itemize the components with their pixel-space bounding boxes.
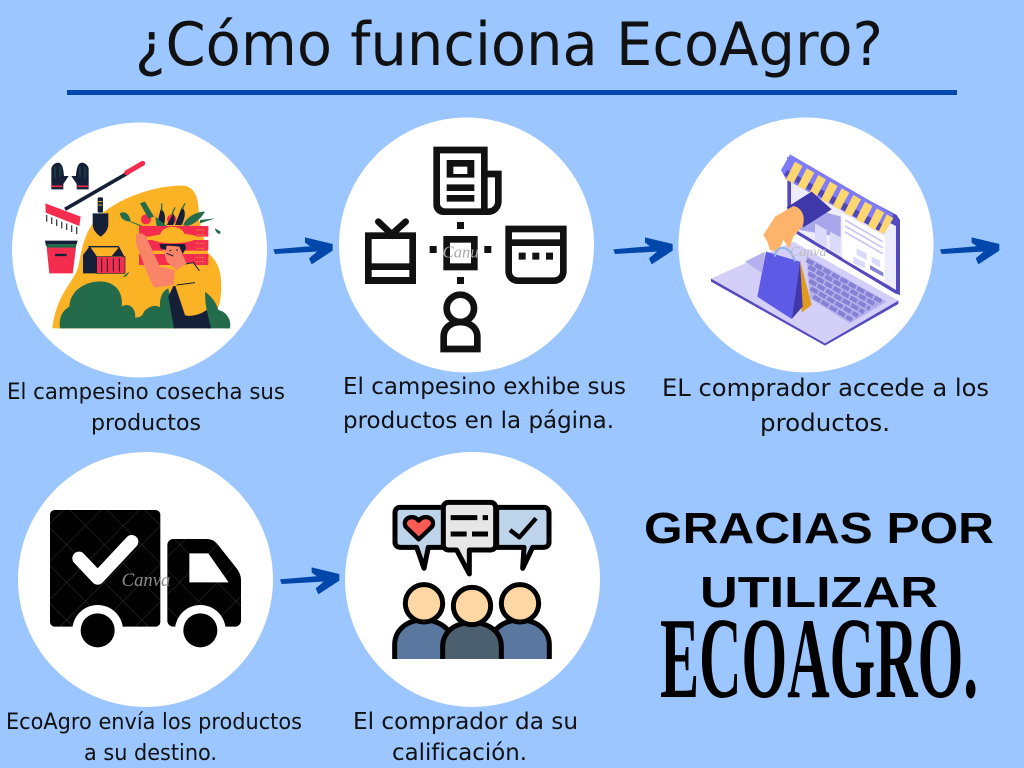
- closing message: GRACIAS POR: [644, 504, 994, 553]
- arrow: step 1 to 2: [273, 237, 333, 264]
- step 4 caption: EcoAgro envía los productos: [6, 710, 302, 735]
- watermark: Canu: [443, 242, 479, 261]
- step 1 caption: El campesino cosecha sus: [7, 380, 285, 405]
- arm and hand: [787, 192, 832, 227]
- step 3 caption: EL comprador accede a los: [662, 374, 989, 402]
- icon: farmer and tools: [45, 163, 230, 328]
- icon: delivery truck with check: [50, 510, 243, 656]
- arrow: step 2 to 3: [613, 237, 673, 264]
- keyboard: [745, 252, 887, 323]
- step 2 caption: productos en la página.: [343, 408, 614, 434]
- laptop base: [711, 278, 898, 346]
- step 2 caption: [343, 374, 626, 434]
- icon: left person: [392, 582, 449, 659]
- closing message: UTILIZAR: [700, 568, 938, 617]
- closing message: [644, 504, 994, 723]
- icon: newspaper: [433, 147, 502, 215]
- icon: delivery truck with check: Canva: [122, 570, 170, 591]
- laptop screen: [787, 157, 900, 295]
- awning: [781, 154, 893, 234]
- icon: check speech bubble: [497, 507, 549, 568]
- gloves: [51, 163, 69, 189]
- trowel: [93, 213, 108, 237]
- arrow: step 4 to 5: [280, 567, 339, 594]
- toolbox: [83, 247, 97, 273]
- step 4 caption: a su destino.: [84, 741, 217, 766]
- icon: laptop storefront: [711, 154, 900, 346]
- step 2 caption: El campesino exhibe sus: [343, 374, 626, 400]
- icon: television: [365, 222, 416, 284]
- icon: heart speech bubble: [395, 507, 447, 568]
- step 3: online shop laptop: [678, 118, 934, 372]
- icon: text speech bubble: [443, 502, 496, 574]
- step 3 caption: [662, 374, 989, 437]
- step 4: delivery truck: [18, 452, 273, 707]
- shirt: [173, 263, 207, 316]
- icon: right person: [494, 582, 552, 659]
- step 1 caption: productos: [91, 411, 201, 436]
- icon: person: [444, 295, 477, 349]
- bucket: [45, 241, 78, 246]
- step 5 caption: El comprador da su: [353, 709, 578, 735]
- icon: media channels: [365, 147, 567, 349]
- icon: browser window: [505, 226, 567, 284]
- step 5: buyers giving ratings: [345, 452, 600, 707]
- icon: laptop storefront: Canva: [790, 245, 827, 260]
- step 4 caption: [6, 710, 302, 766]
- title: ¿Cómo funciona EcoAgro?: [135, 10, 883, 80]
- arm: [136, 233, 175, 288]
- veggies: [142, 212, 201, 226]
- step 3 caption: productos.: [760, 409, 890, 437]
- step 1 caption: [7, 380, 285, 436]
- rake: [65, 173, 128, 209]
- step 5 caption: calificación.: [392, 740, 527, 766]
- step 2: exhibit on channels: [339, 118, 594, 372]
- shopping bags: [800, 260, 812, 313]
- icon: connector hub: [430, 222, 491, 284]
- arrow: step 3 onward: [940, 237, 999, 264]
- icon: people with speech bubbles: [395, 502, 549, 670]
- icon: centre person: [443, 587, 501, 670]
- head: [163, 246, 187, 270]
- step 5 caption: [353, 709, 578, 766]
- step 1: farmer harvesting: [12, 122, 267, 378]
- title underline: [67, 90, 957, 95]
